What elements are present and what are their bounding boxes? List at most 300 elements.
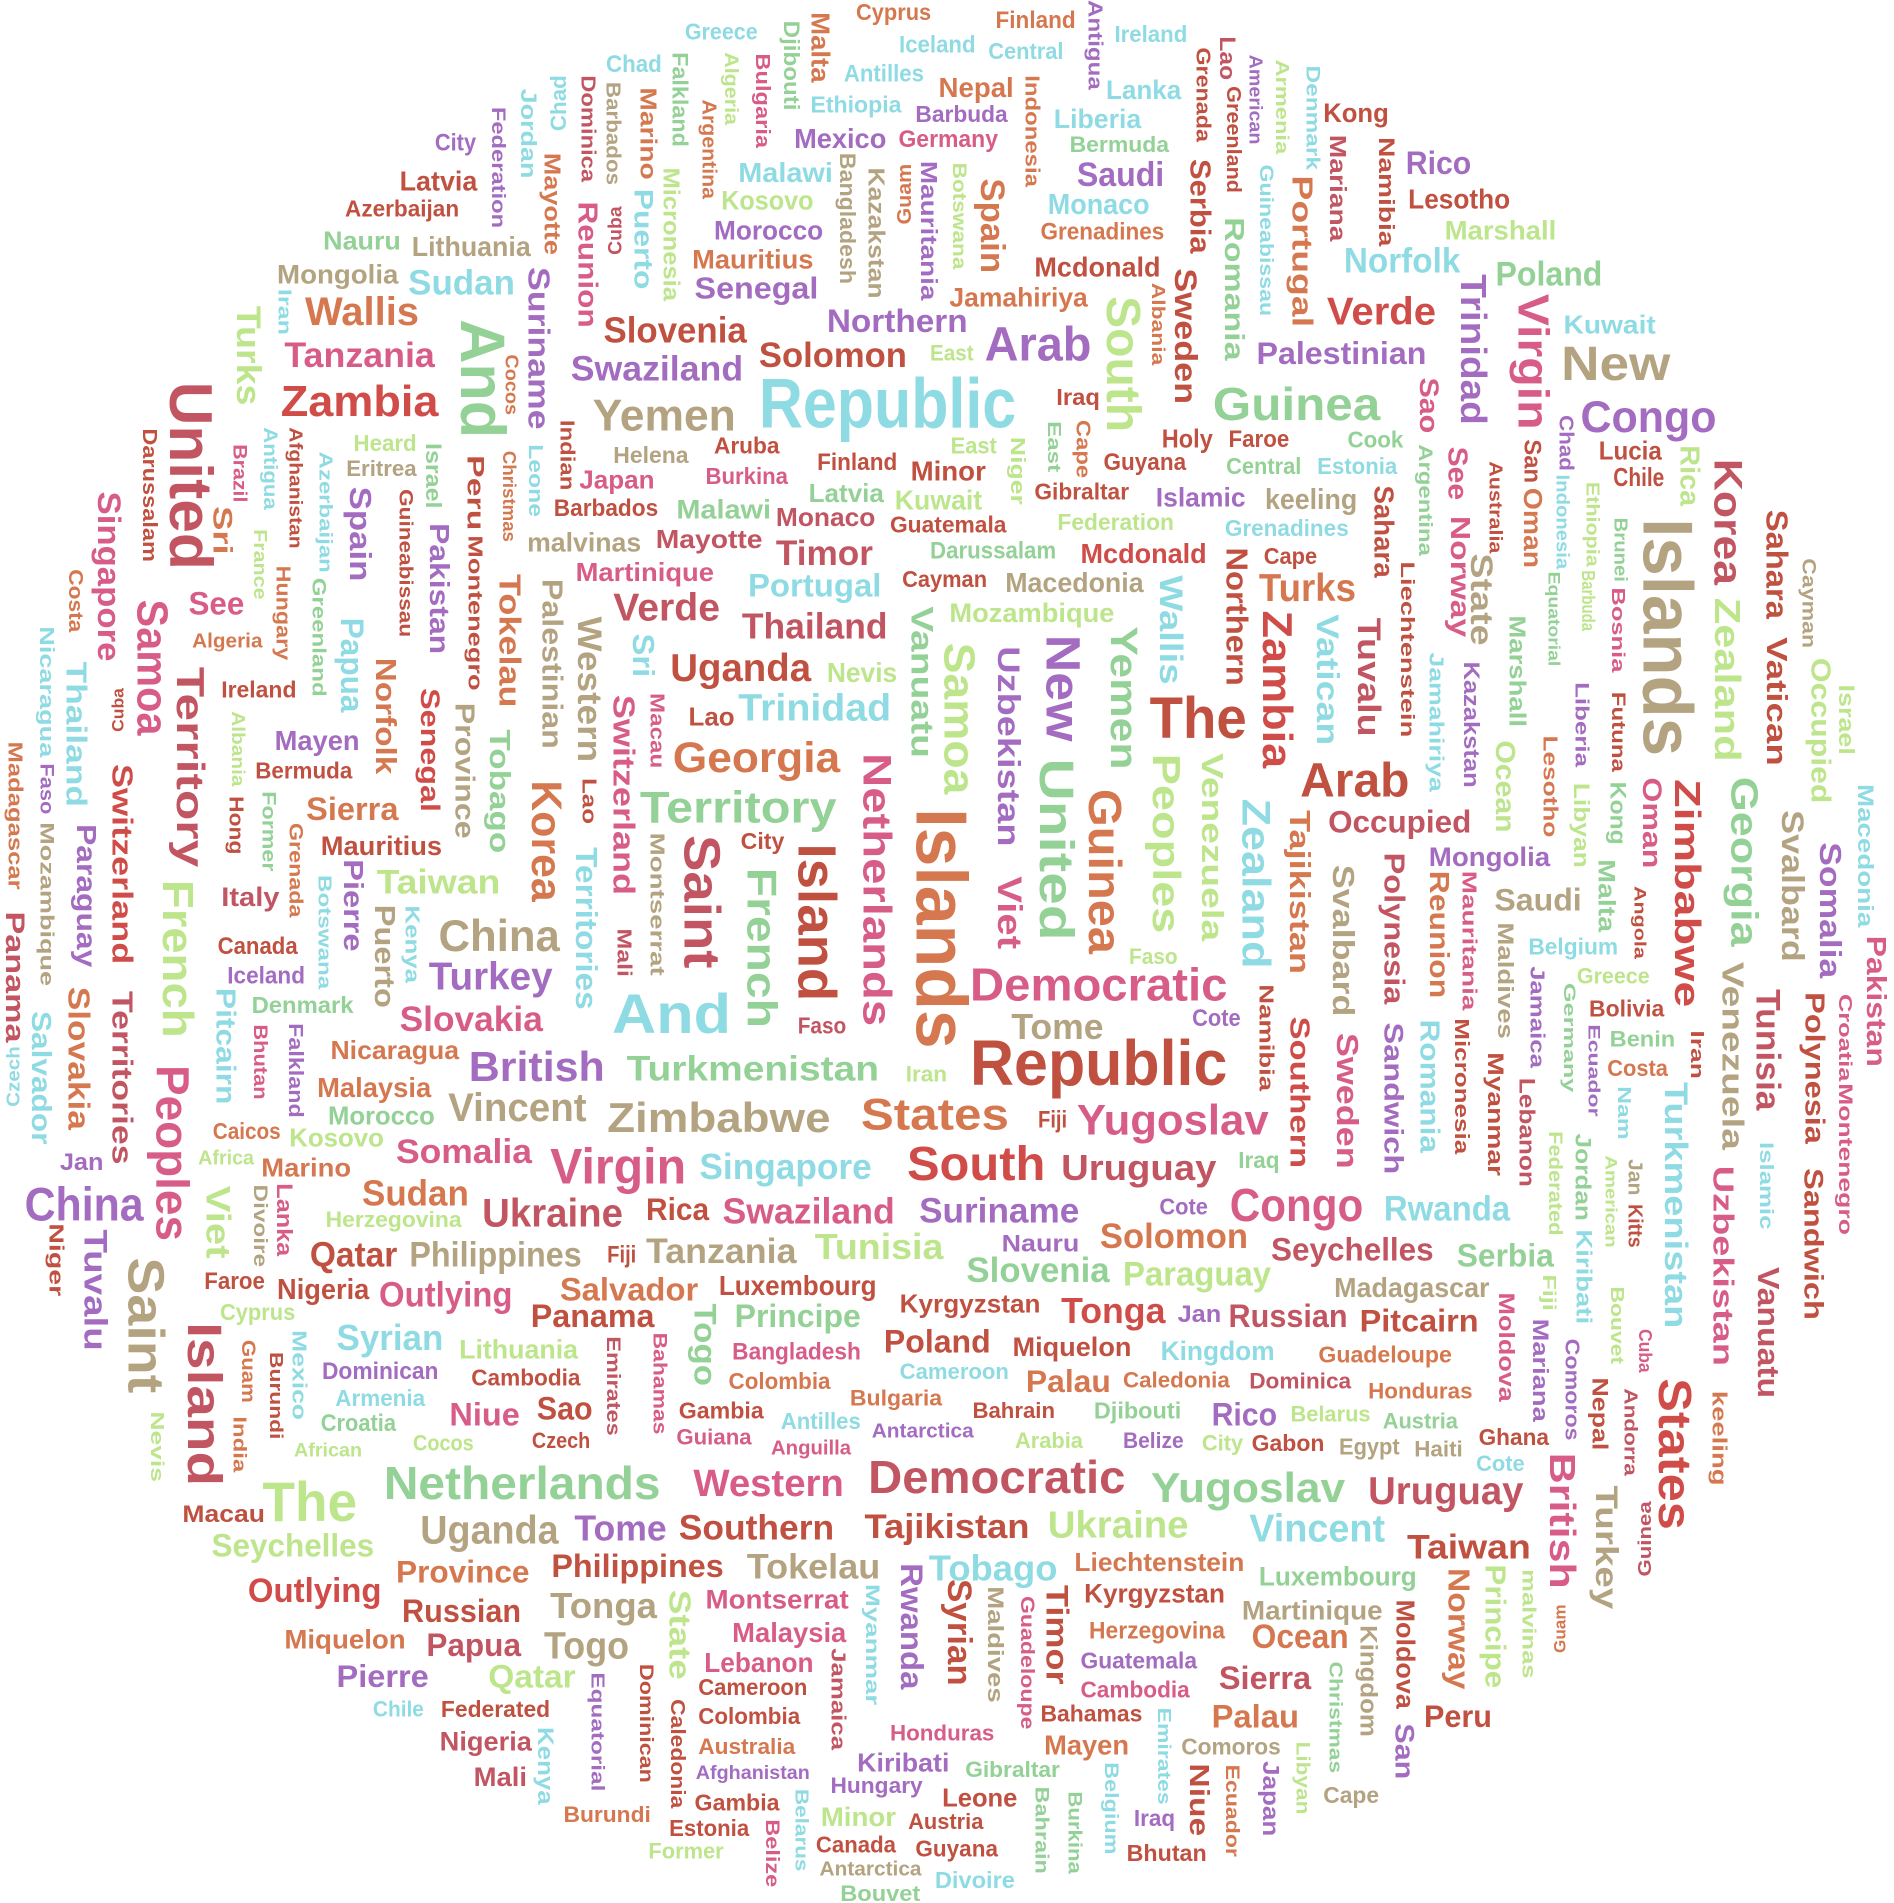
word group: bottom cap of the circle: Libyan xyxy=(1292,1742,1314,1814)
word group: left side: Malaysia xyxy=(317,1072,432,1103)
word group: bottom cap of the circle xyxy=(182,1451,1655,1903)
word group: bottom cap of the circle: Ecuador xyxy=(1221,1765,1243,1857)
word group: bottom cap of the circle: Former xyxy=(648,1838,724,1863)
word group: bottom cap of the circle: Netherlands xyxy=(384,1457,661,1509)
word group: top cap of the circle: Mariana xyxy=(1325,135,1351,242)
word group: bottom cap of the circle: Ocean xyxy=(1252,1618,1349,1656)
word group: left side: Algeria xyxy=(192,629,263,652)
word group: lower centre: Svalbard xyxy=(1326,865,1359,1016)
word group: centre of the circle: Georgia xyxy=(673,734,841,781)
word group: top cap of the circle: Chad xyxy=(546,75,571,131)
word group: upper middle band: Cayman xyxy=(902,566,987,592)
word group: lower centre: Fiji xyxy=(1038,1107,1067,1134)
word group: left side: Czech xyxy=(4,1046,24,1107)
word group: bottom cap of the circle: Maldives xyxy=(983,1586,1008,1703)
word group: centre of the circle: Vanuatu xyxy=(905,606,941,758)
word group: right side upper: Lesotho xyxy=(1539,735,1562,837)
word group: bottom cap of the circle: Guadeloupe xyxy=(1016,1596,1038,1730)
word group: left side: British xyxy=(469,1044,605,1090)
word group: lower centre: Cuba xyxy=(1635,1329,1655,1373)
word group: lower band: Swaziland xyxy=(722,1191,895,1232)
word group: top cap of the circle: Armenia xyxy=(1272,59,1292,155)
word group: lower centre: Kosovo xyxy=(289,1124,384,1152)
word group: lower centre: Sandwich xyxy=(1379,1022,1409,1174)
word group: bottom cap of the circle: Myanmar xyxy=(861,1584,883,1706)
word group: bottom cap of the circle: Timor xyxy=(1039,1585,1075,1685)
word group: bottom cap of the circle: Estonia xyxy=(669,1815,749,1841)
word group: lower band: Haiti xyxy=(1414,1437,1463,1462)
word group: upper middle band: Congo xyxy=(1581,391,1716,442)
word group: left side: Falkland xyxy=(284,1023,307,1118)
word group: upper middle band: Sao xyxy=(1414,377,1444,433)
word group: lower centre: Caicos xyxy=(213,1118,281,1144)
word group: lower centre: Yugoslav xyxy=(1077,1097,1269,1144)
word group: top cap of the circle: Cuba xyxy=(605,206,627,255)
word group: upper middle band: Northern xyxy=(1219,547,1252,686)
word group: lower band: Bulgaria xyxy=(850,1386,943,1411)
word group: centre of the circle: Nevis xyxy=(827,657,897,688)
word group: top cap of the circle: Rico xyxy=(1406,144,1471,181)
word group: lower centre: American xyxy=(1601,1155,1620,1248)
word group: upper middle band: Latvia xyxy=(809,480,885,508)
word group: centre of the circle: Viet xyxy=(990,876,1028,949)
word group: lower centre: Republic xyxy=(970,1027,1227,1099)
word group: bottom cap of the circle: Christmas xyxy=(1325,1661,1345,1773)
word group: bottom cap of the circle: Democratic xyxy=(868,1451,1125,1503)
word group: bottom cap of the circle: Liechtenstein xyxy=(1074,1549,1244,1577)
word group: bottom cap of the circle: Guatemala xyxy=(1081,1647,1197,1673)
word group: top cap of the circle: Poland xyxy=(1496,255,1602,293)
word group: upper middle band: Azerbaijan xyxy=(316,451,336,573)
word group: upper middle band: Grenadines xyxy=(1225,515,1349,541)
word group: centre of the circle: Korea xyxy=(523,780,570,902)
word group: bottom cap of the circle: Sierra xyxy=(1219,1659,1312,1696)
word group: left side: Panama xyxy=(0,911,30,1044)
word group: lower centre: Angola xyxy=(1630,886,1649,959)
word group: upper middle band: Islands xyxy=(1628,518,1707,756)
word group: top cap of the circle: Mcdonald xyxy=(1034,252,1161,283)
word group: lower band: Panama xyxy=(531,1297,655,1334)
word group: bottom cap of the circle: Luxembourg xyxy=(1259,1562,1417,1592)
word group: left side: Botswana xyxy=(314,875,334,990)
word group: bottom cap of the circle: San xyxy=(1390,1723,1420,1779)
word group: lower centre: Occupied xyxy=(1328,804,1471,840)
word group: top cap of the circle: Guineabissau xyxy=(1255,164,1277,316)
word group: lower band: Bahamas xyxy=(648,1333,670,1435)
word group: bottom cap of the circle: Burundi xyxy=(563,1802,651,1827)
word group: top cap of the circle: Puerto xyxy=(629,189,659,289)
word group: top cap of the circle: Antigua xyxy=(1084,0,1107,90)
word group: top cap of the circle: Barbados xyxy=(602,82,625,185)
word group: lower centre: Cote xyxy=(1159,1193,1208,1219)
word group: upper middle band: Kuwait xyxy=(895,485,982,516)
word group: bottom cap of the circle: Jamaica xyxy=(826,1648,849,1751)
word group: left side: Former xyxy=(258,791,280,872)
word group: upper middle band: Australia xyxy=(1486,461,1506,554)
word group: lower band: Dominica xyxy=(1249,1369,1352,1394)
word group: left side: French xyxy=(153,880,202,1038)
word group: centre of the circle: Uganda xyxy=(670,647,811,690)
word group: top cap of the circle: Djibouti xyxy=(779,21,804,110)
word group: bottom cap of the circle: Cambodia xyxy=(1081,1676,1190,1702)
word group: top cap of the circle: Mayotte xyxy=(540,153,566,255)
word group: lower centre: Mongolia xyxy=(1429,842,1551,872)
word group: lower band: Tunisia xyxy=(815,1226,944,1267)
word group: lower centre: Iraq xyxy=(1238,1147,1280,1173)
word group: right side upper: Liechtenstein xyxy=(1396,561,1418,737)
word group: bottom cap of the circle: Minor xyxy=(821,1802,896,1832)
word group: upper middle band: Niger xyxy=(1006,437,1029,505)
word group: top cap of the circle: Greenland xyxy=(1222,86,1245,193)
word group: upper middle band: Aruba xyxy=(714,432,780,458)
word group: right side upper: Bosnia xyxy=(1608,587,1628,674)
word group: upper middle band: Wallis xyxy=(1153,575,1190,684)
word group: upper middle band: United xyxy=(157,382,225,570)
word group: top cap of the circle: Wallis xyxy=(305,290,419,334)
word group: upper middle band: Iran xyxy=(274,289,294,335)
word group: bottom cap of the circle: Syrian xyxy=(940,1579,978,1686)
word group: lower band: Gambia xyxy=(679,1397,764,1423)
word group: lower band: Croatia xyxy=(321,1410,396,1437)
word group: lower band: City xyxy=(1202,1431,1244,1456)
word group: top cap of the circle: Dominica xyxy=(576,75,599,183)
word group: centre of the circle: French xyxy=(738,868,784,1028)
word group: bottom cap of the circle: Divoire xyxy=(935,1867,1015,1893)
word group: top cap of the circle: Lanka xyxy=(1106,75,1182,105)
word group: top cap of the circle: Indonesia xyxy=(1020,75,1043,187)
word group: lower band: Sudan xyxy=(362,1173,469,1214)
word group: top cap of the circle: Guam xyxy=(893,164,916,225)
word group: lower centre: Greece xyxy=(1577,963,1650,988)
word group: lower band: Qatar xyxy=(310,1235,398,1274)
word group: lower centre: Germany xyxy=(1560,983,1579,1093)
word group: upper middle band: Pakistan xyxy=(424,523,455,654)
word group: lower centre: Divoire xyxy=(249,1185,271,1267)
word group: lower centre: Islamic xyxy=(1755,1142,1777,1230)
word group: right side upper: Vatican xyxy=(1310,614,1346,745)
word group: lower centre: Bolivia xyxy=(1589,996,1664,1022)
word group: centre of the circle: Zealand xyxy=(1233,799,1277,968)
word group: lower centre: Polynesia xyxy=(1378,853,1410,1005)
word group: lower centre: Morocco xyxy=(328,1103,435,1131)
word group: lower centre xyxy=(25,777,1892,1530)
word group: bottom cap of the circle: Rwanda xyxy=(894,1563,930,1690)
word group: bottom cap of the circle: Afghanistan xyxy=(696,1762,810,1784)
word group: top cap of the circle: Mexico xyxy=(794,123,886,154)
word group: upper middle band: Darussalam xyxy=(138,428,161,562)
word group: top cap of the circle: Monaco xyxy=(1048,189,1150,221)
word group: lower centre: Saint xyxy=(117,1257,174,1393)
word group: top cap of the circle: Marshall xyxy=(1445,216,1556,246)
word group: lower band: Caledonia xyxy=(1123,1367,1231,1392)
word group: left side: Switzerland xyxy=(106,764,138,964)
word group: left side: Madagascar xyxy=(3,742,26,890)
word group: lower centre: Benin xyxy=(1610,1026,1675,1051)
word group: upper middle band: Martinique xyxy=(576,559,714,587)
word group: upper middle band: Heard xyxy=(354,430,417,456)
word group: right side upper: Cayman xyxy=(1798,558,1820,648)
word group: lower centre: Montenegro xyxy=(1834,1083,1856,1235)
word group: lower centre: Romania xyxy=(1415,1019,1446,1154)
word group: lower band: Cambodia xyxy=(471,1364,581,1390)
word group: top cap of the circle: Chad xyxy=(606,51,662,78)
word group: lower centre: Marino xyxy=(261,1155,351,1183)
word group: lower band: Ghana xyxy=(1479,1424,1549,1450)
word group: bottom cap of the circle: Iraq xyxy=(1134,1805,1175,1831)
word group: lower band: Belize xyxy=(1123,1428,1184,1453)
word group: bottom cap of the circle: Lebanon xyxy=(704,1647,813,1678)
word group: top cap of the circle: Denmark xyxy=(1301,66,1323,170)
word group: top cap of the circle: Mauritius xyxy=(692,245,813,275)
word group: bottom cap of the circle: Comoros xyxy=(1181,1733,1281,1759)
word group: upper middle band: Tanzania xyxy=(284,336,435,375)
word group: bottom cap of the circle: Federated xyxy=(441,1696,550,1722)
word group: lower band: Antarctica xyxy=(872,1419,974,1442)
word group: bottom cap of the circle: Norway xyxy=(1441,1568,1474,1690)
word group: top cap of the circle: Argentina xyxy=(698,100,721,200)
word group: upper middle band: Arab xyxy=(985,318,1091,372)
word group: left side: Ireland xyxy=(221,676,296,702)
word group: lower centre: Southern xyxy=(1285,1016,1316,1168)
word group: lower band: Fiji xyxy=(607,1241,636,1268)
word group: centre of the circle: Guinea xyxy=(1079,789,1131,954)
word group: lower band: Herzegovina xyxy=(326,1207,462,1232)
word group: left side: Hong xyxy=(224,796,247,854)
word group: lower centre: Jamaica xyxy=(1525,966,1548,1069)
word group: left side: China xyxy=(438,910,561,961)
word group: top cap of the circle: Verde xyxy=(1327,290,1436,333)
word group: centre of the circle: Island xyxy=(786,843,845,1001)
word group: lower centre: Ecuador xyxy=(1584,1024,1603,1117)
word group: bottom cap of the circle: Martinique xyxy=(1242,1596,1383,1626)
word group: top cap of the circle: Kuwait xyxy=(1564,311,1656,339)
word group: lower centre: Reunion xyxy=(1424,871,1455,998)
word group: top cap of the circle: Iceland xyxy=(899,31,976,58)
word group: lower centre: Belgium xyxy=(1528,934,1618,960)
word group: top cap of the circle: Ireland xyxy=(1114,21,1187,47)
word group: right side upper: Vatican xyxy=(1760,637,1792,766)
word group: bottom cap of the circle: Ukraine xyxy=(1048,1503,1189,1545)
word group: bottom cap of the circle: Burkina xyxy=(1063,1791,1085,1874)
word group: upper middle band: Palestinian xyxy=(535,579,567,749)
word group: lower band: Niue xyxy=(449,1395,520,1432)
word group: lower centre: Andorra xyxy=(1620,1388,1640,1477)
word group: lower centre: Georgia xyxy=(1723,777,1765,948)
word group: lower centre: Jan xyxy=(1624,1159,1647,1195)
word group: lower centre: Africa xyxy=(198,1146,255,1169)
word group: lower centre: Macedonia xyxy=(1853,784,1878,928)
word group: bottom cap of the circle: Canada xyxy=(816,1832,896,1858)
word group: lower centre: Pakistan xyxy=(1861,936,1892,1067)
word group: lower centre: Iran xyxy=(1687,1030,1707,1079)
word group: top cap of the circle: Botswana xyxy=(948,163,970,270)
word group: lower band: Nigeria xyxy=(277,1274,370,1306)
word group: upper middle band: Helena xyxy=(613,442,689,468)
word group: top cap of the circle: Lao xyxy=(1215,36,1240,80)
word group: bottom cap of the circle: Cameroon xyxy=(698,1674,807,1700)
word group: lower centre: Sweden xyxy=(1330,1033,1363,1169)
word group: upper middle band: Turks xyxy=(1259,567,1356,610)
word group: lower centre: Singapore xyxy=(699,1146,872,1187)
word group: centre of the circle: Macau xyxy=(645,693,668,768)
word group: right side upper: Arab xyxy=(1300,753,1409,807)
word group: top cap of the circle: Albania xyxy=(1148,283,1168,366)
word group: bottom cap of the circle: Australia xyxy=(698,1734,796,1759)
word group: centre of the circle: Samoa xyxy=(935,643,984,795)
word group: lower band: Sao xyxy=(537,1389,593,1426)
word group: upper middle band: Guineabissau xyxy=(395,489,417,637)
word group: lower centre: Vincent xyxy=(448,1086,587,1130)
word group: lower centre: Jordan xyxy=(1570,1134,1595,1221)
word group: bottom cap of the circle: Bhutan xyxy=(1127,1840,1207,1866)
word group: top cap of the circle: Bulgaria xyxy=(751,53,774,149)
word group: upper middle band: Leone xyxy=(524,444,547,517)
word group: bottom cap of the circle: Gibraltar xyxy=(965,1757,1060,1782)
word group: left side: Bhutan xyxy=(249,1024,271,1100)
word group: upper middle band: Turks xyxy=(229,306,267,405)
word group: bottom cap of the circle: Gambia xyxy=(695,1789,780,1815)
word group: lower band: Tanzania xyxy=(646,1232,797,1271)
word group: lower band: Antilles xyxy=(781,1408,861,1434)
word group: lower centre: Uruguay xyxy=(1061,1147,1217,1188)
word group: left side: Nicaragua xyxy=(330,1037,460,1065)
word group: lower band: Rica xyxy=(646,1191,710,1227)
word group: left side: Canada xyxy=(218,933,298,960)
word group: left side: Paraguay xyxy=(71,824,102,968)
word group: left side: Turkey xyxy=(429,955,553,998)
word group: bottom cap of the circle: Leone xyxy=(942,1785,1017,1813)
word group: upper middle band: Zambia xyxy=(281,377,439,426)
word group: bottom cap of the circle: Macau xyxy=(182,1501,265,1528)
word group: upper middle band: Monaco xyxy=(776,504,875,532)
word group: right side upper: Israel xyxy=(1834,684,1859,755)
word group: upper middle band: Suriname xyxy=(522,267,555,430)
word group: lower centre: Nam xyxy=(1614,1086,1634,1140)
word group: upper middle band: Gibraltar xyxy=(1034,479,1129,505)
word group: centre of the circle: Tobago xyxy=(483,729,515,853)
word group: upper middle band: Israel xyxy=(421,443,446,509)
word group: bottom cap of the circle: Uganda xyxy=(420,1508,559,1552)
word group: lower centre: Svalbard xyxy=(1775,810,1811,962)
word group: bottom cap of the circle: Niue xyxy=(1184,1763,1215,1836)
word group: left side: Faso xyxy=(35,763,57,815)
word group: lower centre: Fiji xyxy=(1539,1274,1559,1311)
word group: bottom cap of the circle: British xyxy=(1542,1453,1583,1589)
word group: top cap of the circle: Reunion xyxy=(572,201,603,328)
word group: bottom cap of the circle: Russian xyxy=(402,1592,521,1629)
word group: lower centre: Rwanda xyxy=(1384,1189,1511,1228)
word group: lower centre: Cote xyxy=(1192,1005,1241,1032)
word group: upper middle band: Federation xyxy=(1057,509,1174,535)
word group: lower centre: Saudi xyxy=(1494,881,1582,917)
word group: lower centre: Iran xyxy=(906,1062,947,1087)
word group: lower centre: Uzbekistan xyxy=(1707,1166,1739,1366)
word group: bottom cap of the circle: malvinas xyxy=(1517,1569,1539,1678)
word group: lower centre: Sandwich xyxy=(1799,1168,1829,1320)
word group: centre of the circle: City xyxy=(741,828,785,854)
word group: lower band: Luxembourg xyxy=(719,1270,877,1301)
word group: right side upper: Tuvalu xyxy=(1351,618,1388,737)
word group: lower centre: Faso xyxy=(1129,944,1178,969)
word group: left side: Nicaragua xyxy=(35,626,58,758)
word group: lower band: Guadeloupe xyxy=(1318,1341,1452,1367)
word group: lower band: Syrian xyxy=(337,1317,443,1358)
word group: top cap of the circle: Kong xyxy=(1323,98,1389,128)
word group: bottom cap of the circle: Guam xyxy=(1550,1604,1569,1653)
word group: upper middle band: Norway xyxy=(1445,516,1476,638)
word group: lower centre: Nepal xyxy=(1587,1377,1612,1450)
word group: top cap of the circle: Lesotho xyxy=(1408,184,1510,215)
word group: lower band: Slovenia xyxy=(966,1251,1110,1290)
word group: bottom cap of the circle: Equatorial xyxy=(587,1672,607,1791)
word group: left side: Denmark xyxy=(252,992,354,1018)
word group: lower band: Cote xyxy=(1476,1451,1525,1476)
word group: lower centre: Federated xyxy=(1544,1131,1566,1235)
word group: upper middle band: France xyxy=(250,529,270,600)
word group: upper middle band: Western xyxy=(570,617,608,762)
word group: bottom cap of the circle: Tobago xyxy=(929,1548,1057,1589)
word group: left side: Grenada xyxy=(284,823,306,918)
word group: top cap of the circle: Saudi xyxy=(1077,156,1164,194)
word group: left side: Territories xyxy=(106,991,138,1164)
word group: upper middle band: Argentina xyxy=(1414,444,1436,556)
word group: top cap of the circle: Jordan xyxy=(516,89,541,178)
word group: right side upper: Brunei xyxy=(1611,518,1631,582)
word group: bottom cap of the circle: Antarctica xyxy=(820,1858,922,1881)
word group: top cap of the circle: Romania xyxy=(1219,217,1250,361)
word group: top cap of the circle: Micronesia xyxy=(659,167,685,301)
word group: bottom cap of the circle: Bahrain xyxy=(1031,1786,1053,1874)
word group: lower band: Poland xyxy=(884,1323,991,1360)
word group: upper middle band: Sahara xyxy=(1368,485,1399,578)
word group: bottom cap of the circle: Qatar xyxy=(488,1658,576,1695)
word group: top cap of the circle: Senegal xyxy=(695,272,818,305)
word group: upper middle band: Burkina xyxy=(705,463,788,489)
word group: bottom cap of the circle: Japan xyxy=(1258,1761,1284,1836)
word group: left side: Mayen xyxy=(275,725,360,756)
word group: right side upper: Zealand xyxy=(1707,598,1748,762)
word group: lower centre: Lanka xyxy=(272,1183,297,1257)
word group: lower band: Gabon xyxy=(1252,1430,1324,1456)
word group: top cap of the circle: Kazakstan xyxy=(864,167,890,299)
word group: centre of the circle: Mozambique xyxy=(949,598,1114,628)
word group: right side upper: Futuna xyxy=(1607,692,1629,772)
word group: lower band: Solomon xyxy=(1100,1217,1248,1256)
word group: upper middle band: San xyxy=(1518,439,1545,483)
word group: bottom cap of the circle: Emirates xyxy=(1154,1708,1174,1805)
word group: top cap of the circle: Trinidad xyxy=(1453,274,1494,425)
word group: lower band: Cocos xyxy=(413,1431,474,1456)
word group: lower band: Austria xyxy=(1383,1409,1459,1434)
word group: left side: Turkmenistan xyxy=(627,1050,879,1089)
word group: bottom cap of the circle: Tokelau xyxy=(747,1547,880,1586)
word group: bottom cap of the circle: Montserrat xyxy=(705,1585,849,1615)
word group: upper middle band: South xyxy=(1096,296,1150,432)
word group: top cap of the circle: Malawi xyxy=(738,157,833,188)
word group: left side xyxy=(0,569,879,1241)
word group: upper middle band: Timor xyxy=(776,534,873,573)
word group: lower band: Salvador xyxy=(560,1270,698,1307)
word group: upper middle band: See xyxy=(1442,447,1473,500)
word group: top cap of the circle: Virgin xyxy=(1509,294,1558,430)
word group: upper middle band: Sri xyxy=(207,506,237,555)
word group: bottom cap of the circle: Cape xyxy=(1323,1782,1379,1808)
word group: bottom cap of the circle: Togo xyxy=(544,1625,629,1667)
word group: bottom cap of the circle: Province xyxy=(396,1554,530,1590)
word group: lower centre: China xyxy=(25,1179,144,1232)
word group: upper middle band: Cape xyxy=(1264,543,1317,569)
word group: lower band: Jan xyxy=(1178,1301,1221,1328)
